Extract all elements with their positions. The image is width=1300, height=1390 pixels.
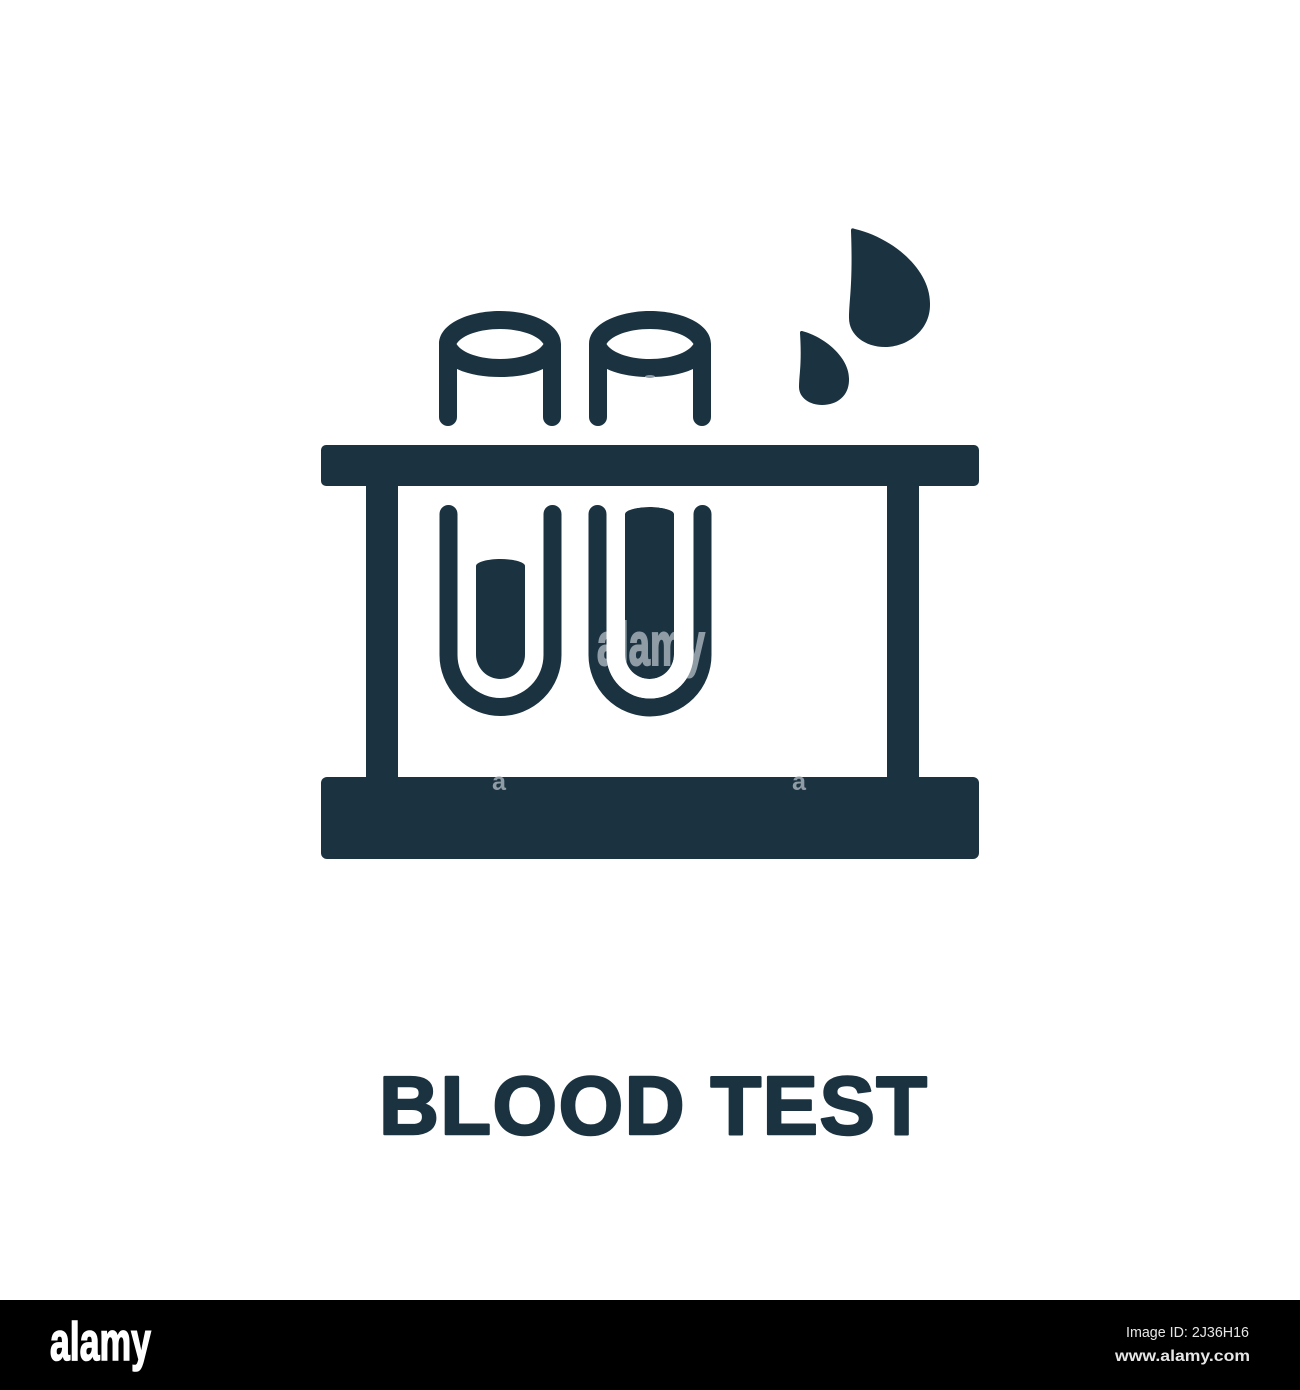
test tube: left — [448, 514, 552, 707]
icon: blood test rack with tubes and drops — [321, 228, 979, 859]
icon: left tube cap — [439, 311, 561, 426]
watermark: small mark on base left: a — [492, 768, 507, 796]
icon: right tube cap — [589, 311, 711, 426]
icon: large blood drop — [849, 228, 930, 347]
rack: left leg — [366, 480, 398, 782]
footer logo: alamy — [50, 1312, 151, 1372]
rack: top bar — [321, 445, 979, 486]
rack: base — [321, 777, 979, 859]
watermark: small mark on cap — [645, 375, 655, 378]
footer bar — [0, 1300, 1300, 1390]
rack: right leg — [887, 480, 919, 782]
blood fill: right tube — [625, 507, 674, 679]
title: BLOOD TEST — [379, 1059, 927, 1152]
blood fill: left tube — [476, 559, 525, 679]
watermark: alamy over right tube: alamy — [597, 611, 705, 678]
icon: small blood drop — [799, 331, 849, 405]
footer image id: Image ID: 2J36H16 — [1126, 1324, 1249, 1341]
test tube: right — [598, 514, 702, 708]
watermark: small mark on base right: a — [792, 768, 807, 796]
right tube inner gap — [606, 505, 694, 699]
footer url: www.alamy.com — [1114, 1348, 1250, 1365]
